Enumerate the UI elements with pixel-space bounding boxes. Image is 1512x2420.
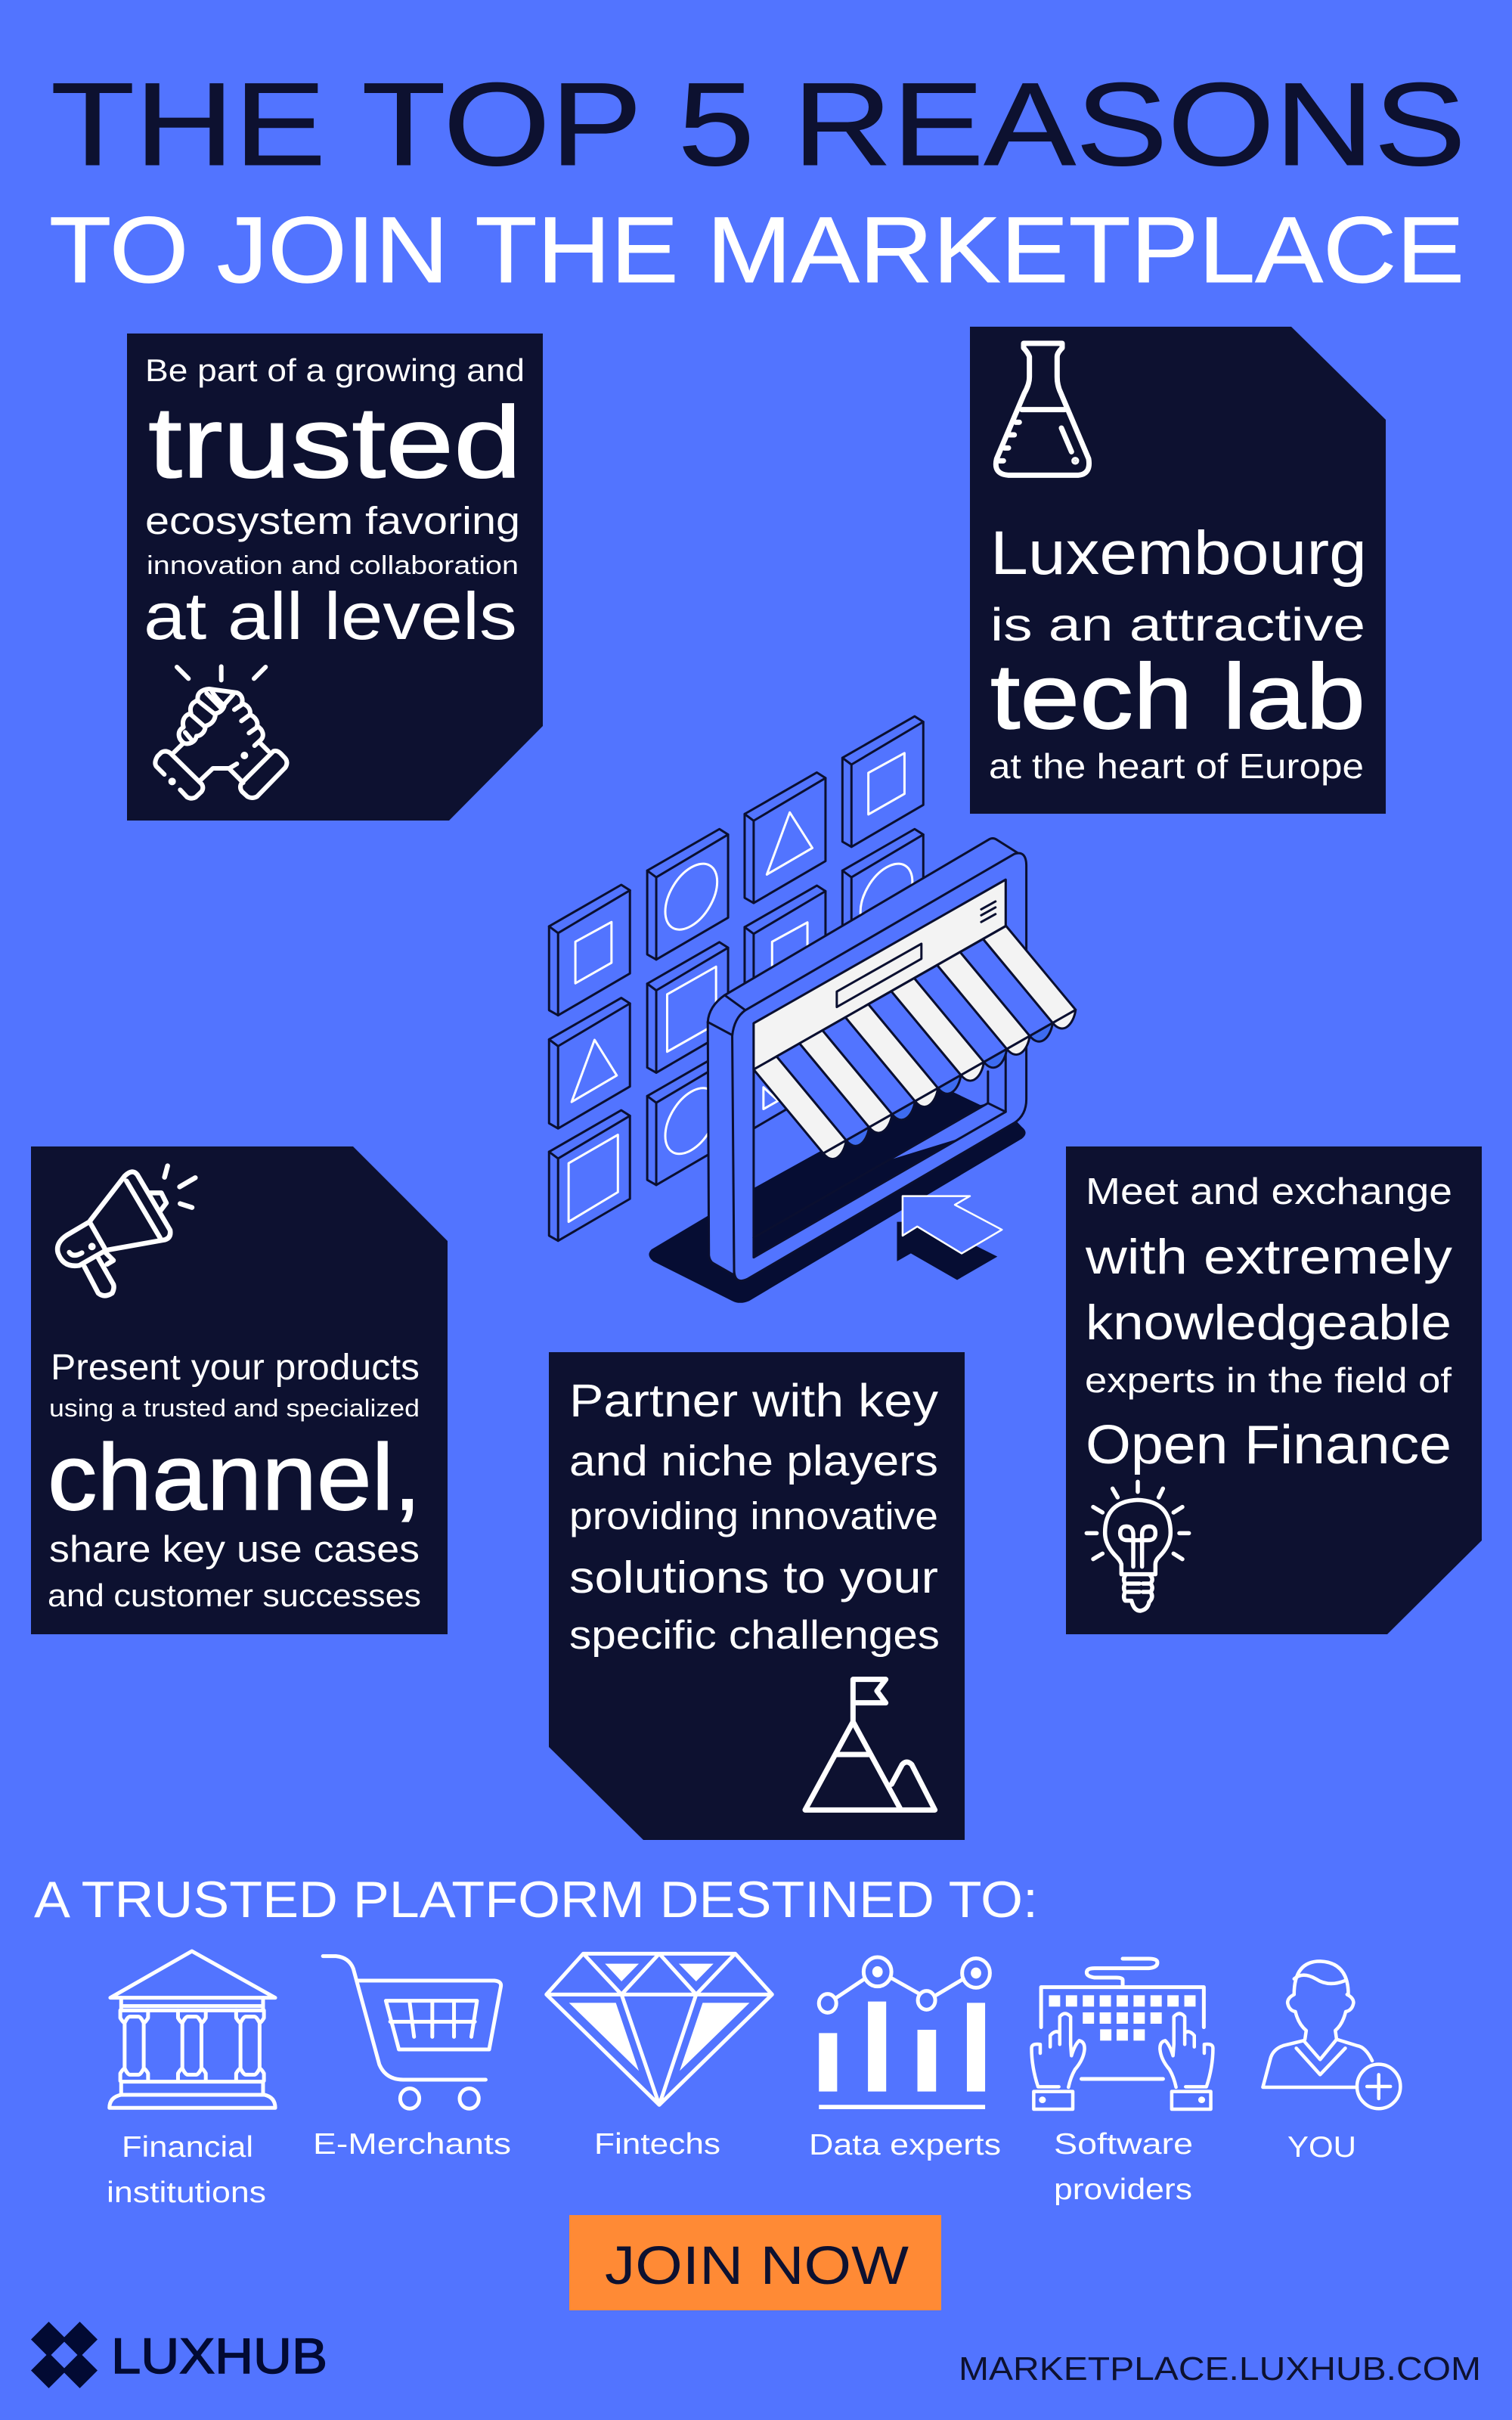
button: join now	[569, 2215, 941, 2310]
cursor shadow	[897, 1222, 997, 1280]
panel: Luxembourg tech lab	[970, 327, 1386, 814]
panel: meet and exchange: Open Finance	[1086, 1415, 1452, 1475]
panel: present your products: share key use cases	[49, 1529, 420, 1570]
panel: partner with key players	[549, 1352, 965, 1840]
panel: present your products: channel,	[48, 1426, 421, 1530]
audience: software providers: Software	[1054, 2128, 1193, 2161]
icon: bar and line chart	[819, 1957, 990, 2109]
panel: partner with key players: providing innovative	[569, 1494, 938, 1537]
title: TO JOIN THE MARKETPLACE	[49, 198, 1464, 302]
audience: data experts: Data experts	[809, 2129, 1001, 2161]
storefront frame	[708, 839, 1027, 1281]
logo: LUXHUB: LUXHUB	[111, 2328, 327, 2384]
panel: meet and exchange: with extremely	[1085, 1229, 1453, 1284]
panel: trusted ecosystem: trusted	[148, 386, 522, 499]
panel: meet and exchange: knowledgeable	[1086, 1295, 1452, 1350]
panel: Luxembourg tech lab: Luxembourg	[990, 519, 1367, 588]
audience: financial institutions: Financial	[122, 2131, 253, 2164]
audience: e-merchants	[313, 1956, 511, 2161]
panel: meet and exchange: experts in the field of	[1085, 1360, 1452, 1400]
panel: meet and exchange	[1066, 1146, 1482, 1634]
product tiles	[549, 716, 923, 1241]
section heading: A TRUSTED PLATFORM DESTINED TO:	[34, 1871, 1038, 1928]
audience: you	[1263, 1961, 1400, 2164]
panel: partner with key players: specific challenges	[569, 1613, 940, 1658]
ground shadow	[649, 1121, 1026, 1303]
panel: trusted ecosystem: ecosystem favoring	[145, 499, 520, 542]
icon: megaphone	[57, 1166, 195, 1295]
icon: keyboard and hands	[1031, 1959, 1213, 2109]
panel: meet and exchange: Meet and exchange	[1086, 1171, 1452, 1212]
panel: trusted ecosystem: Be part of a growing and	[145, 352, 525, 388]
audience: you: YOU	[1287, 2131, 1356, 2164]
panel: partner with key players: solutions to your	[569, 1553, 938, 1602]
button: join now: JOIN NOW	[605, 2236, 909, 2296]
window floor	[754, 1085, 988, 1238]
icon: bank	[110, 1951, 275, 2108]
panel: partner with key players: Partner with key	[569, 1375, 939, 1426]
audience: financial institutions: institutions	[107, 2176, 266, 2209]
panel: Luxembourg tech lab: at the heart of Europe	[989, 746, 1364, 786]
icon: diamond	[547, 1953, 772, 2105]
audience: software providers	[1031, 1959, 1213, 2206]
panel: present your products: Present your products	[51, 1348, 420, 1388]
audience: fintechs: Fintechs	[594, 2128, 720, 2161]
cursor arrow	[903, 1196, 1002, 1253]
panel: present your products: and customer successes	[48, 1578, 421, 1613]
audience: data experts	[809, 1957, 1001, 2161]
panel: trusted ecosystem: at all levels	[144, 579, 517, 653]
audience: fintechs	[547, 1953, 772, 2161]
audience: financial institutions	[107, 1951, 275, 2209]
audience: software providers: providers	[1054, 2173, 1192, 2206]
icon: mountain with flag	[805, 1680, 935, 1810]
icon: shopping cart	[323, 1956, 501, 2108]
awning	[754, 880, 1076, 1159]
panel: present your products: using a trusted and specialized	[49, 1395, 420, 1422]
logo: LUXHUB	[31, 2322, 327, 2388]
icon: light bulb	[1086, 1481, 1189, 1611]
title	[49, 59, 1466, 302]
panel: partner with key players: and niche players	[569, 1437, 938, 1485]
website url: MARKETPLACE.LUXHUB.COM	[959, 2350, 1481, 2387]
icon: flask	[996, 343, 1089, 475]
icon: person with plus	[1263, 1961, 1400, 2108]
icon: handshake	[155, 666, 287, 799]
panel: Luxembourg tech lab: is an attractive	[990, 599, 1365, 650]
title: THE TOP 5 REASONS	[51, 59, 1466, 191]
panel: Luxembourg tech lab: tech lab	[990, 645, 1365, 748]
illustration: isometric marketplace storefront	[549, 716, 1076, 1303]
panel: trusted ecosystem: innovation and collaboration	[147, 551, 519, 580]
panel: present your products	[31, 1146, 448, 1634]
panel: trusted ecosystem	[127, 334, 543, 821]
audience: e-merchants: E-Merchants	[313, 2128, 511, 2161]
